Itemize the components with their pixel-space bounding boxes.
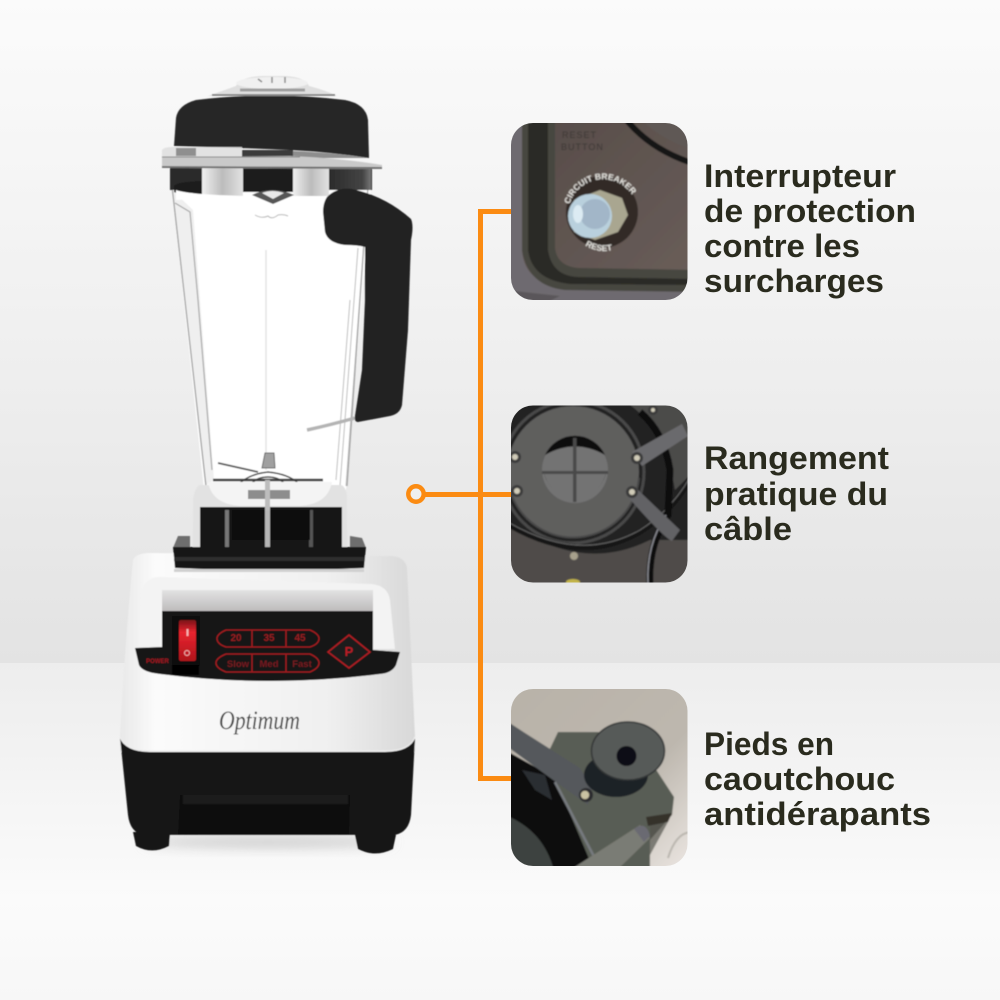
lid: [174, 96, 369, 158]
speed buttons: Slow: [227, 659, 250, 670]
time buttons: 20: [230, 633, 242, 644]
panel: cable storage photo: [511, 406, 688, 582]
right foot: [355, 835, 396, 854]
text: cable storage: pratique du: [704, 476, 888, 512]
pulse button: [328, 635, 370, 668]
jar top band with reflections: [170, 166, 372, 204]
lid cap: [208, 76, 337, 96]
speed buttons: Fast: [292, 659, 313, 670]
text: cable storage: câble: [704, 511, 792, 547]
text: overload protection: Interrupteur: [704, 158, 896, 194]
text: cable storage: Rangement: [704, 440, 889, 476]
time buttons: [217, 630, 319, 647]
text: rubber feet: caoutchouc: [704, 761, 895, 797]
panel: overload switch photo: [511, 123, 688, 300]
white housing: [120, 553, 415, 752]
blender product: [120, 76, 415, 854]
top bevel: [138, 577, 395, 649]
panel: rubber feet photo: [511, 689, 688, 866]
jar rim: [162, 147, 382, 169]
jar body: [170, 172, 372, 490]
speed buttons: [216, 654, 319, 672]
brand name: Optimum: [219, 706, 300, 735]
circuit breaker label: CIRCUIT BREAKER: [564, 172, 637, 204]
black collar: [173, 536, 366, 572]
text: overload protection: surcharges: [704, 263, 884, 299]
grey strip: [162, 590, 373, 611]
floor shadow: [143, 837, 393, 847]
control panel: [135, 611, 400, 681]
text: cable storage: [704, 440, 889, 547]
reset ring label: RESET: [584, 240, 613, 252]
time buttons: 45: [294, 633, 306, 644]
handle: [323, 189, 412, 422]
reset label: RESET: [562, 130, 597, 140]
text: rubber feet: Pieds en: [704, 726, 834, 762]
text: overload protection: de protection: [704, 193, 916, 229]
pulse button: P: [345, 644, 354, 659]
black lower base: [120, 737, 415, 835]
time buttons: 35: [263, 633, 275, 644]
text: rubber feet: antidérapants: [704, 796, 931, 832]
text: rubber feet: [704, 726, 931, 832]
jar clear base: [193, 480, 347, 548]
text: overload protection: [704, 158, 916, 299]
power label: POWER: [146, 659, 169, 665]
power switch: [172, 616, 200, 675]
speed buttons: Med: [260, 659, 279, 670]
panel: overload switch photo: BUTTON: [561, 142, 604, 152]
blades: [213, 453, 323, 483]
left foot: [133, 832, 170, 850]
connector lines: [408, 209, 511, 781]
text: overload protection: contre les: [704, 228, 860, 264]
